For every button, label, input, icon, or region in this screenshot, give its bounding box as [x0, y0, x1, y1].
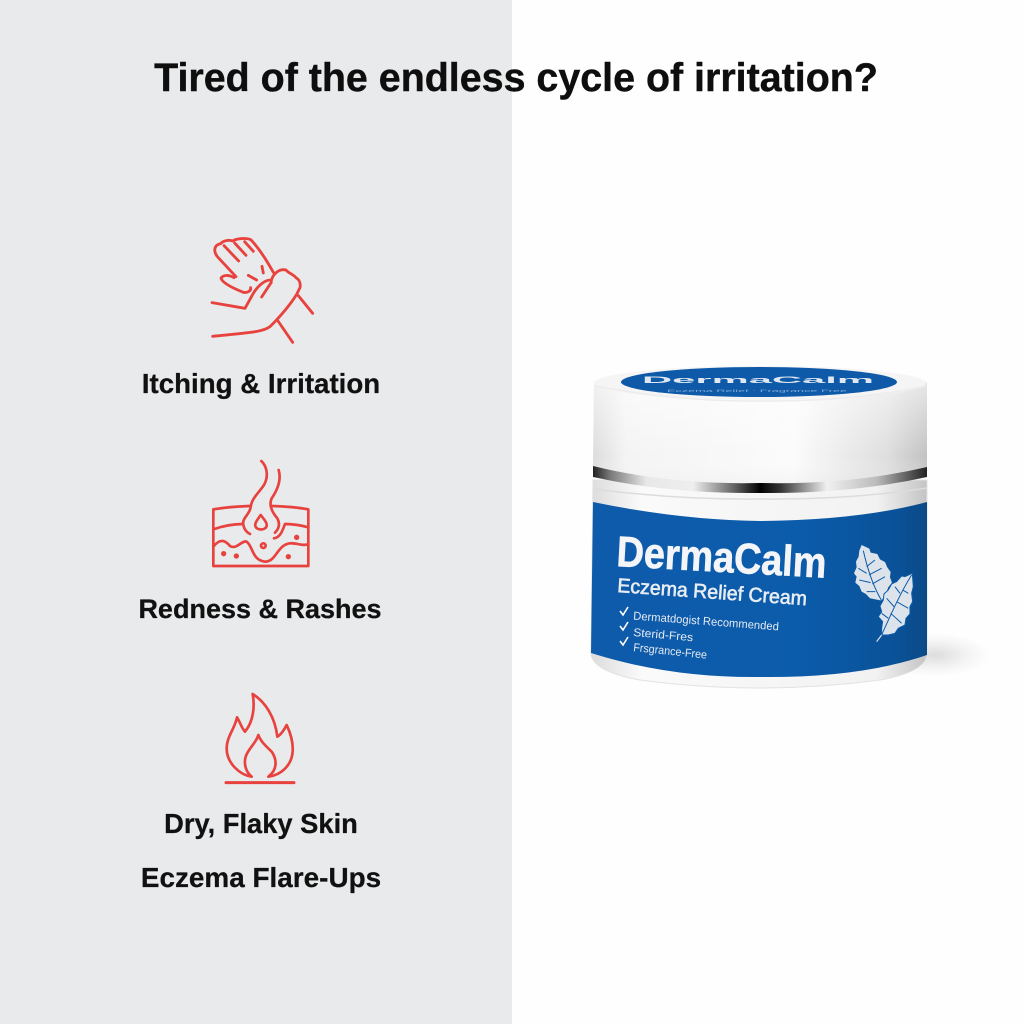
lid brand text: DermaCalm [642, 374, 874, 385]
claims list: Frsgrance-Free [633, 642, 708, 662]
product: cream jar [591, 366, 990, 688]
icon: scratching hand [212, 239, 313, 342]
jar body [591, 480, 927, 688]
icon: flame [226, 694, 294, 783]
jar shadow [880, 633, 990, 677]
jar brand: DermaCalm [615, 528, 828, 588]
lid blue disc [621, 367, 897, 397]
lid side [593, 382, 927, 488]
icon: skin layers [213, 461, 308, 566]
label: redness: Redness & Rashes [138, 594, 382, 624]
title: Tired of the endless cycle of irritation? [154, 56, 878, 100]
panel: left grey background [0, 0, 512, 1024]
label: itching: Itching & Irritation [142, 368, 380, 399]
body ridge [593, 488, 927, 499]
claims list: Sterid-Fres [633, 627, 694, 644]
lid top [594, 366, 926, 400]
claims list [620, 607, 779, 662]
jar subtitle: Eczema Relief Cream [617, 575, 808, 610]
chrome band [593, 466, 927, 493]
leaves [854, 545, 913, 642]
label: dry skin: Dry, Flaky Skin [164, 808, 358, 839]
blue label [591, 502, 927, 677]
claims list: Dermatdogist Recommended [633, 611, 779, 633]
lid small text: Eczema Relief · Fragrance Free [667, 388, 849, 393]
label: flare-ups: Eczema Flare-Ups [141, 862, 381, 893]
